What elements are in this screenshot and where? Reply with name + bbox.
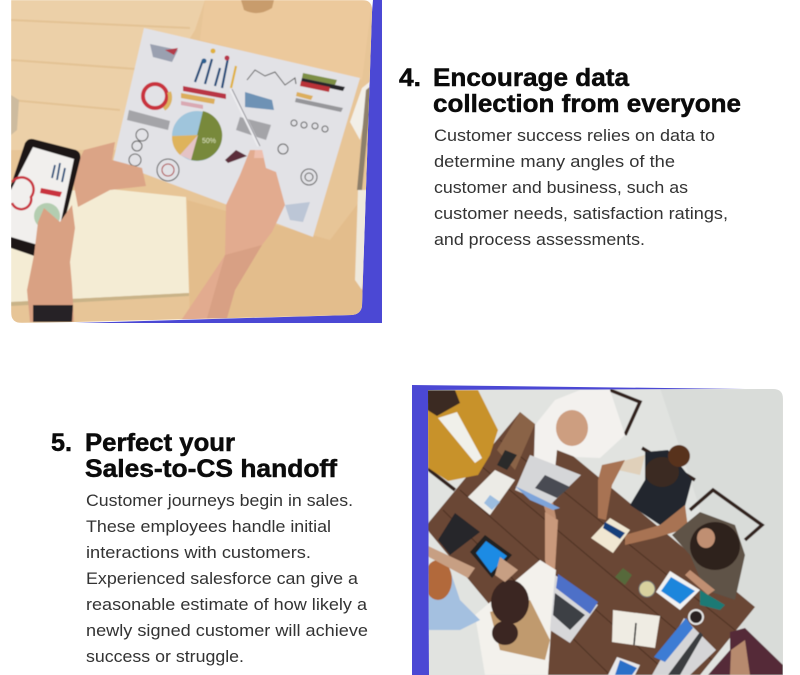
table bbox=[425, 412, 755, 675]
panel: tip 5 text bbox=[51, 429, 368, 666]
notebook and mug bbox=[612, 610, 660, 648]
photo accent: blue frame bbox=[75, 0, 382, 323]
body: tip 5: These employees handle initial bbox=[86, 517, 331, 536]
photo accent: blue frame bbox=[412, 385, 745, 675]
chairs bbox=[423, 390, 762, 540]
heading: tip 4: 4. bbox=[399, 64, 421, 92]
sheet coloured bars bbox=[183, 86, 226, 99]
body: tip 5 bbox=[86, 491, 368, 666]
heading: tip 5: Perfect your bbox=[85, 429, 235, 457]
photo: hands holding data report over a desk bbox=[11, 0, 373, 325]
body: tip 5: success or struggle. bbox=[86, 647, 244, 666]
sheet bar chart bbox=[195, 48, 236, 88]
report sheet bbox=[113, 28, 360, 237]
body: tip 5: newly signed customer will achieve bbox=[86, 621, 368, 640]
body: tip 4: customer needs, satisfaction ratings, bbox=[434, 204, 728, 223]
heading: tip 5: 5. bbox=[51, 429, 72, 457]
sheet donut bbox=[143, 84, 167, 108]
laptop bottom right bbox=[652, 618, 716, 675]
sheet line chart bbox=[247, 70, 296, 85]
laptop centre bbox=[550, 575, 598, 643]
phone bbox=[11, 139, 80, 260]
panel: tip 5 photo bbox=[412, 385, 784, 675]
person: woman in dark vest bbox=[630, 450, 692, 525]
pen bbox=[231, 89, 259, 146]
body: tip 4: Customer success relies on data to bbox=[434, 126, 715, 145]
sheet text blocks and circles bbox=[236, 117, 271, 140]
body: tip 4: customer and business, such as bbox=[434, 178, 688, 197]
body: tip 5: interactions with customers. bbox=[86, 543, 311, 562]
body: tip 4: determine many angles of the bbox=[434, 152, 675, 171]
person: left in blue shirt bbox=[428, 575, 480, 630]
body: tip 4 bbox=[434, 126, 728, 249]
person: woman in tan top bbox=[475, 560, 556, 675]
person: curly hair bbox=[672, 512, 745, 600]
tablet right bbox=[656, 571, 700, 610]
heading: tip 4: Encourage data bbox=[433, 64, 630, 92]
notebook bbox=[11, 188, 189, 302]
heading: tip 5: Sales-to-CS handoff bbox=[85, 455, 338, 483]
heading: tip 4 bbox=[399, 64, 741, 118]
small phone bottom bbox=[608, 657, 640, 675]
body: tip 5: Experienced salesforce can give a bbox=[86, 569, 359, 588]
hand on phone bbox=[27, 205, 75, 322]
sheet pie chart 50% bbox=[172, 111, 222, 161]
person: bottom right maroon bbox=[708, 628, 783, 675]
panel: tip 4 photo bbox=[11, 0, 382, 325]
heading: tip 5 bbox=[51, 429, 338, 483]
laptops and papers bbox=[515, 455, 581, 505]
photo: hands holding data report over a desk: 50% bbox=[202, 138, 216, 145]
left hand holding sheet bbox=[72, 142, 146, 207]
person: bald man in white bbox=[533, 390, 626, 466]
body: tip 5: Customer journeys begin in sales. bbox=[86, 491, 353, 510]
handshake arm bbox=[545, 512, 558, 582]
heading: tip 4: collection from everyone bbox=[433, 90, 741, 118]
right hand with pen bbox=[178, 150, 285, 325]
phone on notebook bbox=[591, 518, 630, 553]
person: yellow jacket bbox=[421, 390, 498, 481]
body: tip 5: reasonable estimate of how likely a bbox=[86, 595, 368, 614]
tablet left bbox=[470, 535, 512, 578]
photo: team shaking hands around a table bbox=[421, 388, 784, 675]
panel: tip 4 text bbox=[399, 64, 741, 249]
body: tip 4: and process assessments. bbox=[434, 230, 645, 249]
